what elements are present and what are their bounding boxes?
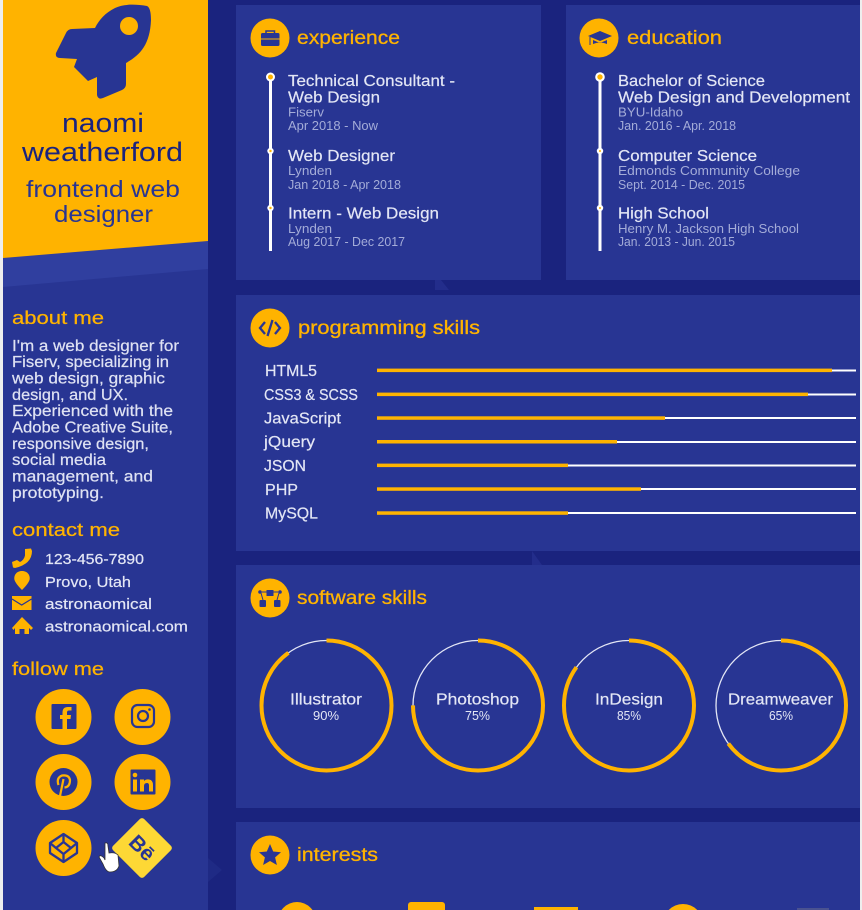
- panel: education: [566, 5, 860, 280]
- job: technical consultant: [288, 73, 455, 133]
- gauge: photoshop: 75%: [465, 709, 490, 723]
- bar chart: PHP: [265, 482, 298, 499]
- about text: responsive design,: [12, 436, 149, 453]
- about text: Fiserv, specializing in: [12, 354, 169, 371]
- about text: management, and: [12, 468, 153, 486]
- school: edmonds: Computer Science: [618, 148, 757, 165]
- icon: instagram: [114, 689, 170, 745]
- gauge: indesign: InDesign: [595, 692, 663, 708]
- school: byu-idaho: Web Design and Development: [618, 90, 851, 106]
- school: byu-idaho: Bachelor of Science: [618, 73, 765, 90]
- job: web designer: Web Designer: [288, 148, 396, 165]
- icon: behance diamond: [111, 817, 173, 879]
- heading: follow me: follow me: [12, 658, 104, 679]
- heading: programming skills: programming skills: [298, 317, 480, 339]
- gauge: illustrator: [262, 640, 392, 770]
- school: byu-idaho: Jan. 2016 - Apr. 2018: [618, 119, 736, 133]
- bar chart: JSON: [264, 458, 306, 475]
- heading: education: education: [627, 27, 722, 49]
- school: edmonds: Edmonds Community College: [618, 164, 800, 178]
- gauge: illustrator: 90%: [313, 709, 339, 723]
- about text: Adobe Creative Suite,: [12, 420, 173, 436]
- job title: [26, 176, 180, 227]
- icon: software: [250, 578, 290, 618]
- contact list: Provo, Utah: [45, 574, 131, 591]
- about text: I'm a web designer for: [12, 338, 179, 355]
- about text: web design, graphic: [11, 370, 165, 388]
- icon: code: [250, 308, 290, 348]
- job: technical consultant: Apr 2018 - Now: [288, 119, 379, 133]
- job: intern: Lynden: [288, 222, 332, 236]
- bar chart: HTML5: [265, 363, 317, 380]
- gauge: photoshop: Photoshop: [436, 692, 519, 708]
- contact list: [12, 548, 188, 636]
- icon: pinterest: [36, 754, 92, 810]
- job: web designer: [288, 148, 401, 192]
- panel: interests: [236, 822, 860, 910]
- icon: home: [12, 617, 33, 634]
- gauge: dreamweaver: Dreamweaver: [728, 692, 834, 708]
- header banner: [3, 0, 208, 258]
- name: naomi: [62, 108, 144, 138]
- contact list: 123-456-7890: [45, 551, 144, 568]
- icon: location pin: [14, 571, 30, 590]
- heading: experience: experience: [297, 27, 400, 49]
- icon: phone: [12, 548, 32, 568]
- gauge: illustrator: Illustrator: [290, 692, 363, 708]
- sidebar: [3, 0, 208, 910]
- school: edmonds: Sept. 2014 - Dec. 2015: [618, 178, 745, 192]
- icon: hand cursor: [99, 843, 119, 872]
- icon: facebook: [36, 689, 92, 745]
- school: high school: High School: [618, 206, 709, 222]
- job: web designer: Jan 2018 - Apr 2018: [288, 178, 401, 192]
- name: [21, 108, 183, 167]
- panel: experience: [236, 5, 541, 280]
- heading: interests: interests: [297, 844, 378, 866]
- icon: linkedin: [114, 754, 170, 810]
- gauge: indesign: [564, 640, 694, 770]
- contact list: astronaomical.com: [45, 618, 188, 636]
- job: web designer: Lynden: [288, 164, 332, 178]
- gauge: photoshop: [413, 640, 543, 770]
- panel: software skills: [236, 565, 860, 808]
- job: technical consultant: Technical Consultant -: [288, 73, 455, 90]
- heading: contact me: contact me: [12, 519, 120, 540]
- panel: programming skills: [236, 295, 860, 551]
- icon: rocket: [56, 5, 151, 99]
- bar chart: [263, 363, 856, 522]
- bar chart: jQuery: [263, 434, 315, 451]
- bar chart: CSS3 & SCSS: [264, 387, 358, 404]
- icon: briefcase: [250, 18, 290, 58]
- school: byu-idaho: BYU-Idaho: [618, 106, 683, 120]
- about text: prototyping.: [12, 485, 104, 502]
- icon: codepen: [36, 820, 92, 876]
- school: high school: [618, 206, 799, 249]
- school: byu-idaho: [618, 73, 851, 133]
- about text: Experienced with the: [12, 403, 173, 420]
- job: intern: Intern - Web Design: [288, 206, 439, 222]
- school: high school: Jan. 2013 - Jun. 2015: [618, 235, 735, 249]
- icon: behance diamond: Bē: [124, 831, 159, 866]
- bar chart: MySQL: [265, 506, 318, 522]
- gauge: dreamweaver: [716, 640, 846, 770]
- icon: star: [250, 836, 290, 874]
- gauge: dreamweaver: 65%: [769, 709, 793, 723]
- heading: about me: about me: [12, 307, 104, 328]
- bar chart: JavaScript: [264, 410, 342, 428]
- timeline: [595, 72, 605, 251]
- job title: frontend web: [26, 176, 180, 202]
- job: technical consultant: Fiserv: [288, 106, 325, 120]
- timeline: [266, 72, 275, 251]
- school: high school: Henry M. Jackson High School: [618, 222, 799, 236]
- about text: design, and UX.: [12, 387, 128, 404]
- gauge: indesign: 85%: [617, 709, 641, 723]
- icon: envelope: [12, 596, 32, 610]
- icon: graduation cap: [580, 18, 618, 58]
- job: intern: Aug 2017 - Dec 2017: [288, 235, 405, 249]
- job: technical consultant: Web Design: [288, 90, 380, 106]
- contact list: astronaomical: [45, 596, 152, 613]
- school: edmonds: [618, 148, 800, 192]
- heading: software skills: software skills: [297, 587, 427, 609]
- social icons: [36, 689, 173, 879]
- about text: social media: [12, 452, 106, 469]
- job title: designer: [54, 201, 153, 227]
- name: weatherford: [21, 137, 183, 167]
- about text: [11, 338, 179, 502]
- interest icons: [278, 902, 829, 910]
- job: intern: [288, 206, 439, 249]
